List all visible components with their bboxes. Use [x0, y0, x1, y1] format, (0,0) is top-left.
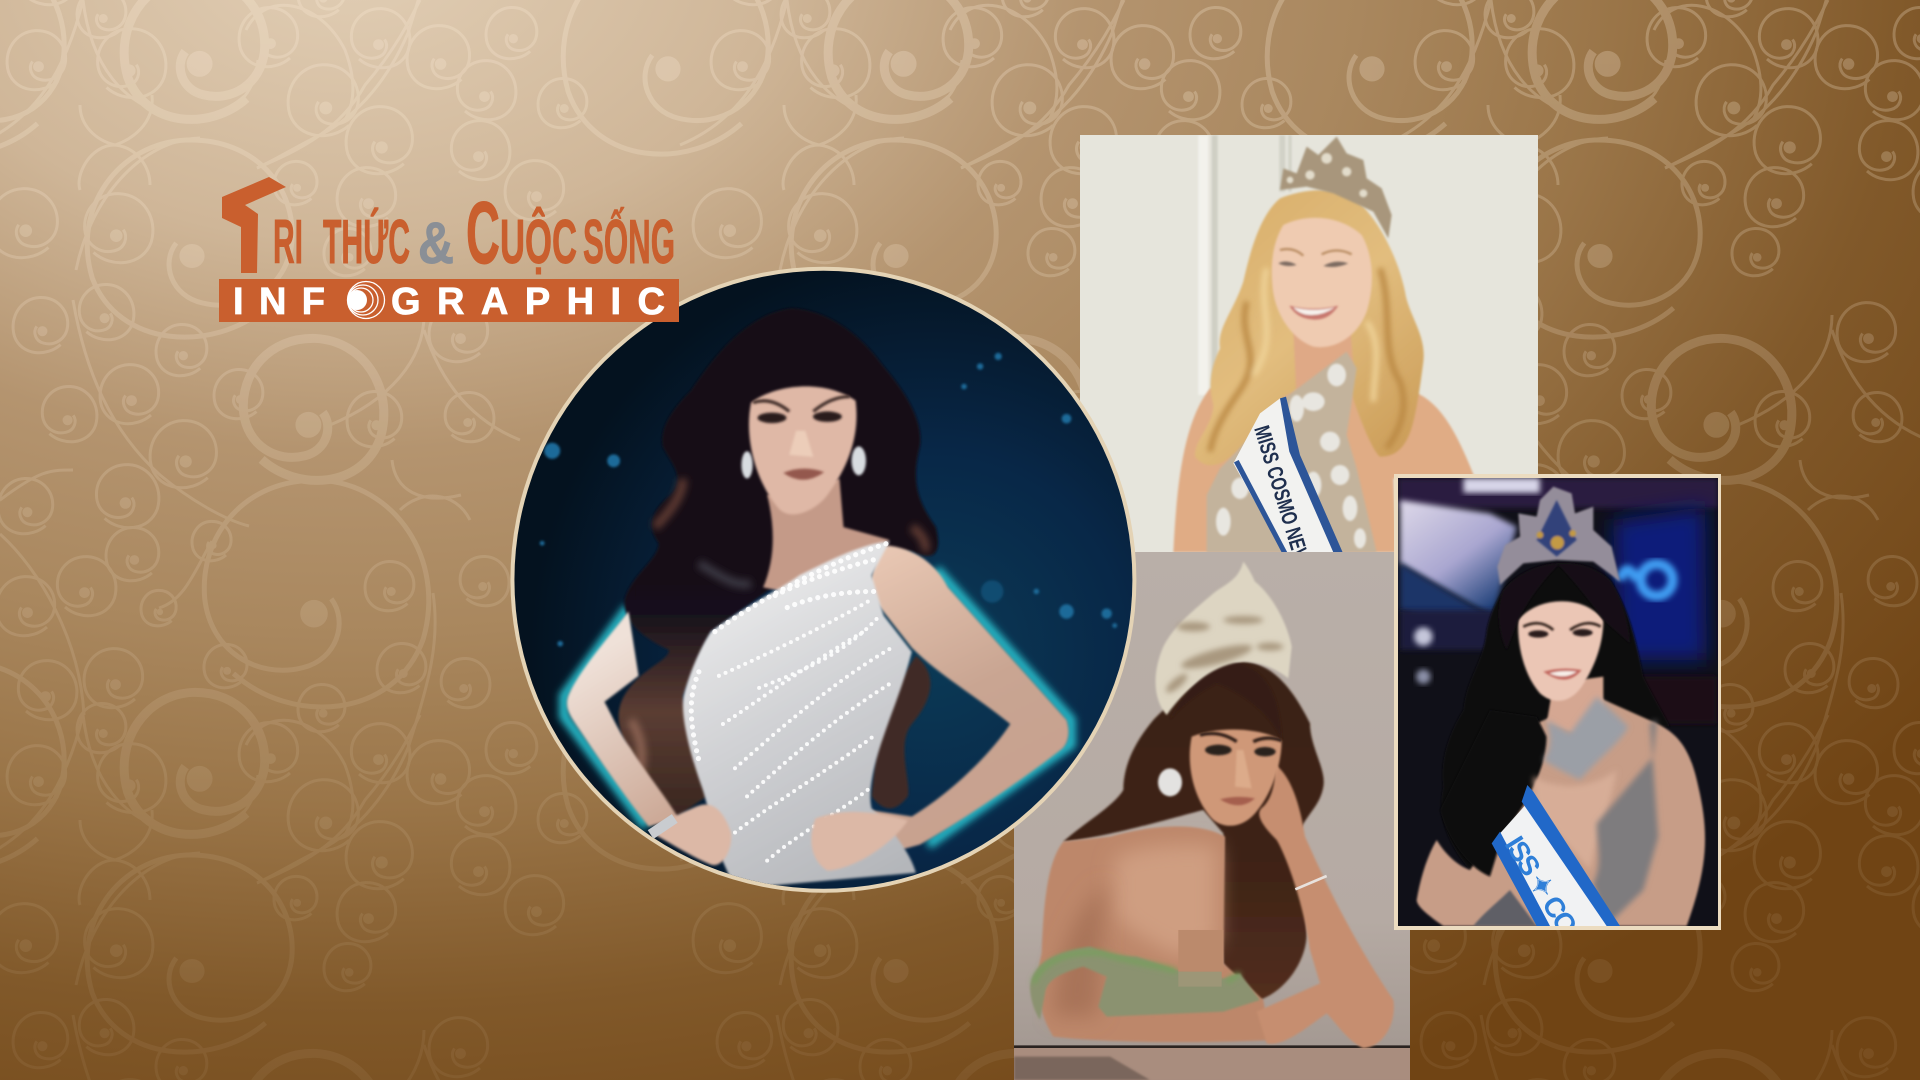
hands: [651, 804, 908, 871]
white pearl dress: [683, 541, 916, 889]
pearl strands: [691, 543, 892, 861]
long hair: [1063, 662, 1324, 1000]
torso and left arm: [1038, 827, 1270, 1042]
portrait rim: [510, 267, 1136, 893]
stage lights: [1398, 478, 1718, 723]
large crown: [1156, 562, 1292, 715]
right arm: [813, 545, 1069, 869]
blue logo on screen: [1620, 564, 1673, 596]
sequin dress: [1207, 352, 1377, 552]
neck: [1547, 677, 1603, 733]
face: [1518, 601, 1603, 701]
long black hair: [1441, 563, 1670, 877]
crown: [1497, 487, 1620, 585]
logo wordmark: [273, 183, 675, 282]
left arm: [567, 612, 679, 826]
hair shine: [631, 479, 925, 792]
logo wordmark: UỘC: [500, 208, 577, 277]
logo wordmark: RI: [273, 208, 303, 277]
photo 3 backdrop: [1014, 552, 1410, 1080]
shoulders: [1173, 388, 1475, 552]
bracelet: [1295, 876, 1327, 889]
hair shading: [1210, 268, 1404, 452]
hair parting over forehead: [1499, 563, 1630, 650]
photo: dark-haired queen with frame: [1394, 474, 1721, 940]
logo wordmark: &: [418, 211, 454, 276]
blonde hair: [1195, 190, 1424, 465]
sash: [1492, 785, 1620, 940]
chest highlight: [1533, 770, 1617, 870]
logo O ring icon: [347, 282, 384, 318]
facial features: [753, 397, 850, 480]
green dress: [1030, 947, 1260, 1020]
body: [1417, 697, 1705, 926]
facial features: [1278, 249, 1352, 320]
sash: MISS COSMO NEW: [1249, 422, 1315, 567]
photo: brunette queen with large crown: [1014, 552, 1410, 1080]
logo T mark: [222, 177, 286, 273]
logo: Tri Thức & Cuộc Sống Infographic: [219, 177, 679, 323]
banner lettering: INF: [233, 281, 325, 323]
photo 4 backdrop: [1398, 478, 1718, 926]
logo banner: [219, 279, 679, 322]
night sky backdrop: [510, 270, 1141, 901]
face: [749, 386, 857, 514]
logo wordmark: SỐNG: [583, 208, 675, 277]
facial features: [1523, 623, 1601, 680]
chest highlight: [1113, 845, 1217, 957]
sash: ISS ✦ CO: [1499, 831, 1583, 940]
cream frame: [1394, 474, 1721, 930]
face: [1190, 730, 1282, 826]
earring: [1158, 768, 1182, 796]
main circular portrait: [510, 267, 1141, 901]
blue star glints: [540, 353, 1117, 646]
bracelet: [651, 818, 675, 835]
crown: [1280, 137, 1392, 238]
banner lettering: [233, 281, 665, 323]
banner lettering: GRAPHIC: [391, 281, 665, 323]
lower hair overlap: [1440, 710, 1547, 877]
face: [1272, 218, 1372, 347]
main hair mass: [619, 308, 938, 820]
logo wordmark: C: [466, 183, 500, 282]
censor blur: [1178, 930, 1223, 987]
facial features: [1200, 733, 1282, 805]
sash: [1233, 397, 1343, 567]
crystal necklace: [1543, 697, 1628, 780]
far hair strands: [872, 656, 930, 808]
neck: [1294, 334, 1353, 388]
photo: blonde queen: [1080, 135, 1538, 567]
right arm and hand: [1257, 763, 1394, 1048]
wall moulding: [1198, 135, 1292, 395]
cyan rim glow on arms: [564, 569, 1071, 845]
hair front strand: [1190, 662, 1242, 689]
photo 1 backdrop: [1080, 135, 1538, 552]
sequins on gown: [1593, 720, 1658, 926]
table top: [1014, 1046, 1410, 1080]
neck and chest: [763, 479, 890, 591]
logo wordmark: THỨC: [323, 208, 410, 277]
arm shadow: [1053, 883, 1107, 1017]
earrings: [741, 446, 866, 479]
